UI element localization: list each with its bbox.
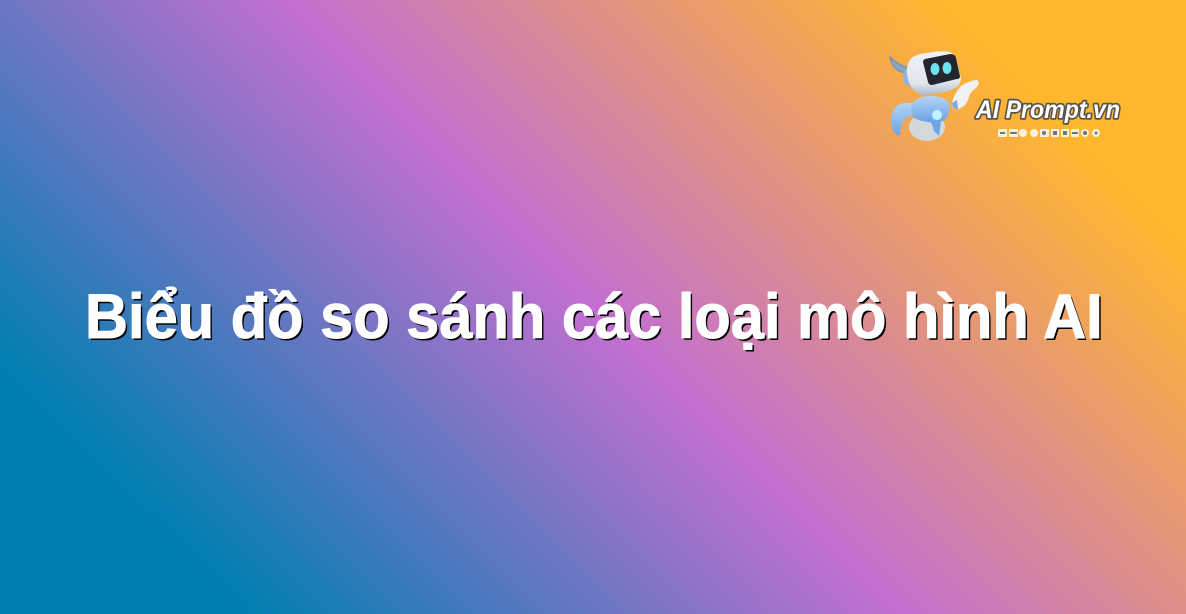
robot leg strap (927, 119, 941, 136)
robot antenna (890, 57, 907, 73)
robot right hand (952, 80, 979, 109)
robot left arm (891, 103, 915, 136)
robot chest light (932, 110, 942, 120)
robot ear (903, 68, 915, 86)
robot eyes (930, 62, 952, 75)
robot right arm shadow (952, 100, 958, 109)
robot head (907, 51, 961, 95)
robot lower body (909, 113, 945, 141)
logo wordmark: AI Prompt.vn (975, 96, 1120, 124)
logo small icon row (998, 129, 1100, 137)
robot visor (923, 54, 960, 85)
title: Biểu đồ so sánh các loại mô hình AI (85, 282, 1103, 352)
robot torso (911, 96, 950, 122)
icon: robot mascot (890, 51, 979, 141)
